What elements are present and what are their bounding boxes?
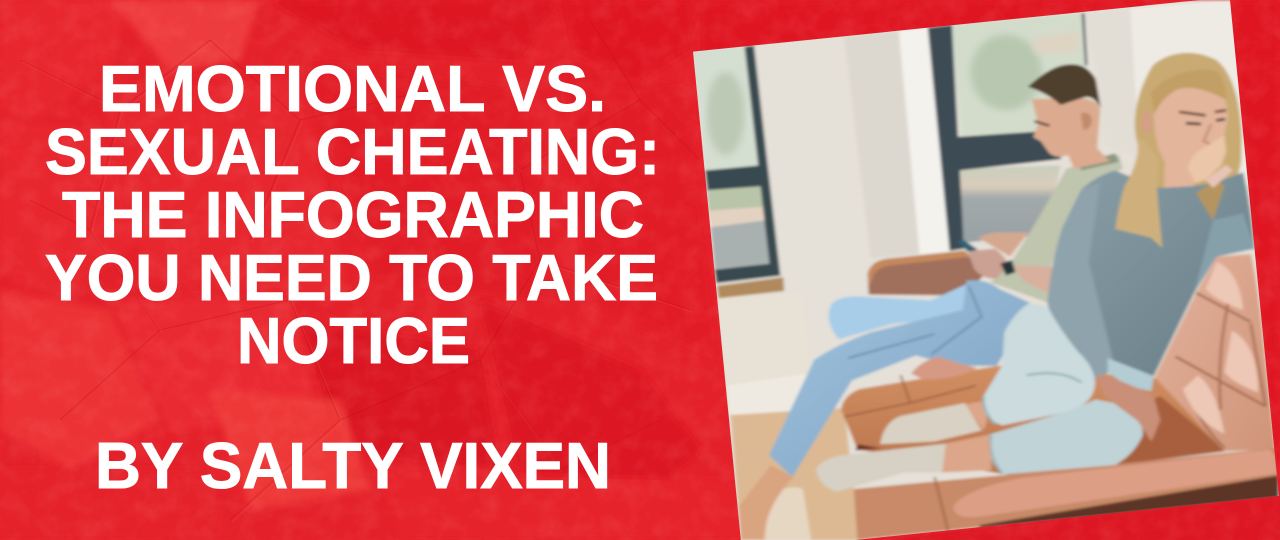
woman sweater: [1082, 170, 1254, 377]
right window: [928, 13, 1087, 251]
man far leg: [829, 284, 980, 339]
sofa: [841, 251, 1279, 540]
woman face: [1154, 86, 1228, 188]
title line 4: YOU NEED TO TAKE: [45, 241, 658, 314]
woman lower hand: [1096, 374, 1160, 442]
man: [739, 64, 1123, 540]
room wall: [690, 0, 1280, 540]
woman socks: [880, 403, 982, 444]
byline: BY SALTY VIXEN: [95, 429, 611, 502]
woman hair front: [1115, 138, 1162, 248]
man lower foot: [739, 465, 793, 540]
woman hand and bracelet: [1187, 135, 1226, 183]
title line 3: THE INFOGRAPHIC: [62, 178, 644, 251]
woman hair: [1133, 52, 1244, 190]
woman ankles: [965, 401, 987, 431]
title: [45, 52, 660, 502]
woman: [816, 53, 1254, 492]
title line 1: EMOTIONAL VS.: [99, 52, 606, 125]
floor and rug: [731, 408, 859, 540]
photo: couple sitting apart on a leather sofa: [690, 0, 1280, 540]
man neck and face: [1032, 98, 1110, 169]
man upper foot: [911, 356, 977, 380]
man hair: [1028, 64, 1101, 108]
man forearm, hands and phone: [1014, 265, 1053, 294]
man near leg: [769, 280, 1031, 477]
title line 5: NOTICE: [237, 304, 470, 377]
left window: [693, 45, 784, 298]
woman pants: [983, 303, 1095, 425]
man torso: [991, 155, 1123, 303]
title line 2: SEXUAL CHEATING:: [45, 115, 660, 188]
